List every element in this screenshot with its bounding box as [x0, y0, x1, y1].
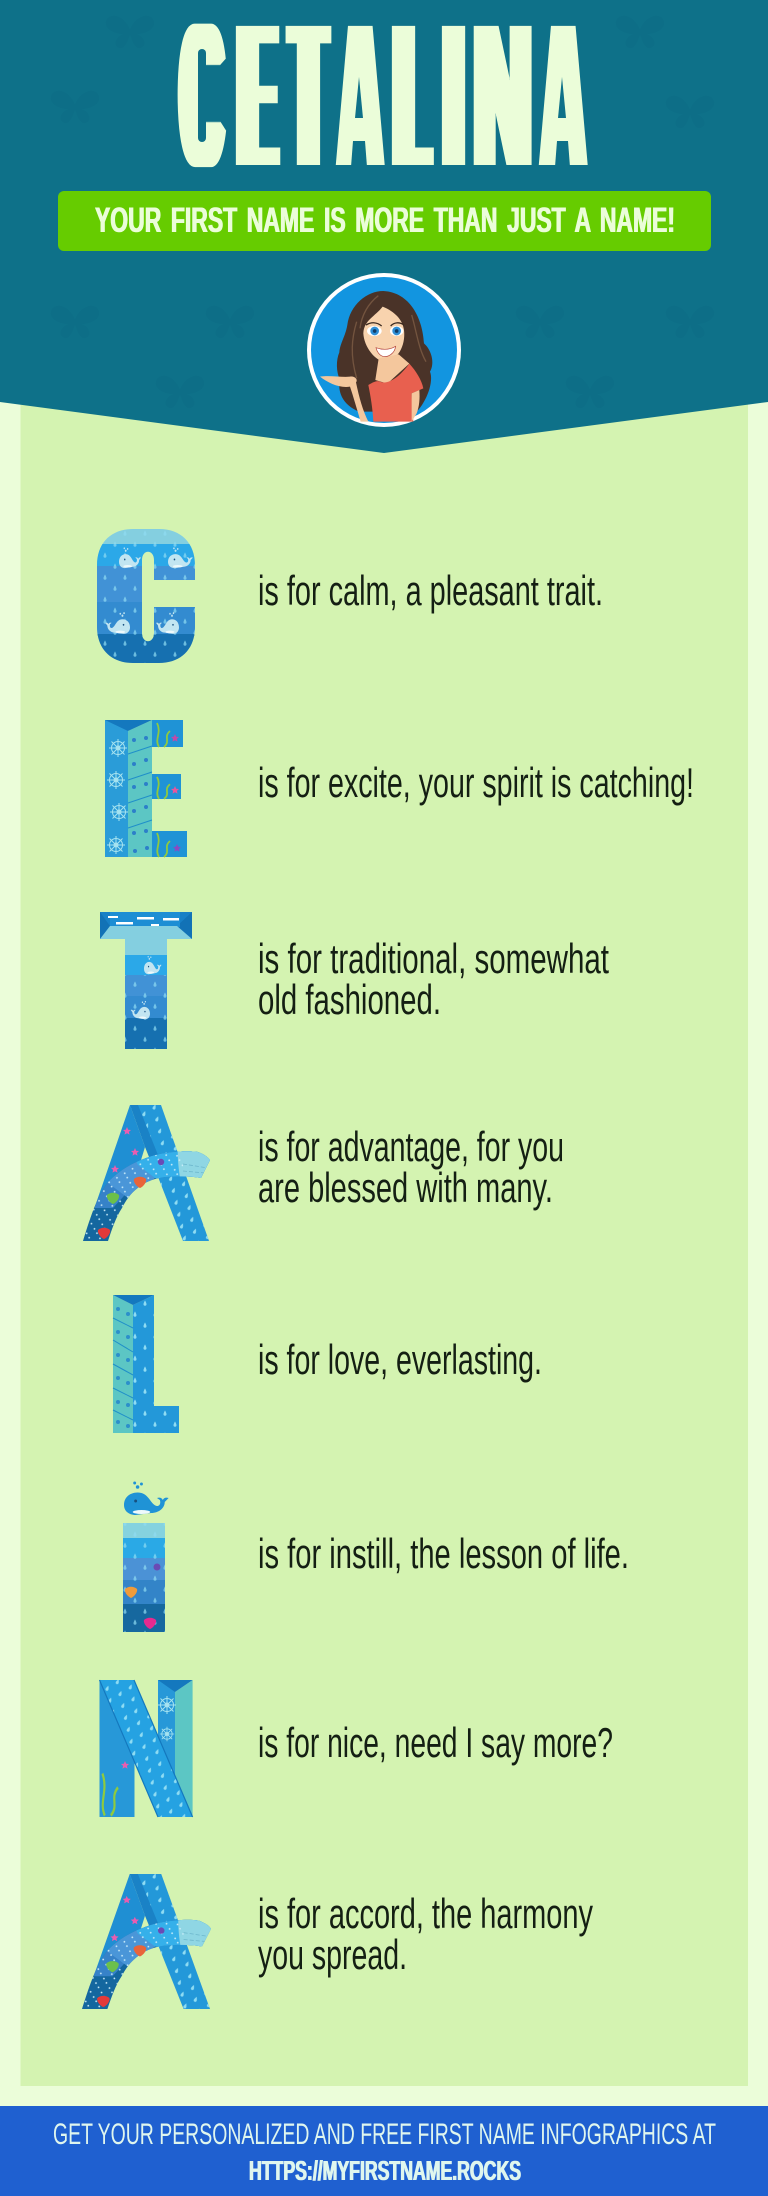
text: A second: you spread.: [258, 1931, 407, 1978]
text: T: [258, 935, 609, 1023]
text: T: is for traditional, somewhat: [258, 935, 609, 982]
letter N: [100, 1680, 193, 1817]
letter A: [83, 1100, 213, 1245]
text: A: [258, 1123, 564, 1211]
header background: [0, 0, 768, 453]
text: A: are blessed with many.: [258, 1164, 553, 1211]
letter L: [113, 1295, 179, 1433]
text: A: is for advantage, for you: [258, 1123, 564, 1170]
letter T: [100, 912, 192, 1050]
letter A (second): [82, 1869, 214, 2013]
footer: HTTPS://MYFIRSTNAME.ROCKS: [249, 2155, 521, 2186]
footer: [0, 2106, 768, 2196]
avatar: woman: [307, 273, 461, 427]
panel: letters background: [20, 380, 748, 2086]
text: C: is for calm, a pleasant trait.: [258, 567, 603, 614]
banner: [58, 191, 711, 251]
text: T: old fashioned.: [258, 976, 441, 1023]
text: L: is for love, everlasting.: [258, 1336, 542, 1383]
text: A second: [258, 1890, 593, 1978]
letter I with whale: [123, 1482, 169, 1633]
letter C: [97, 529, 195, 664]
text: A second: is for accord, the harmony: [258, 1890, 593, 1937]
letter E: [105, 720, 187, 857]
